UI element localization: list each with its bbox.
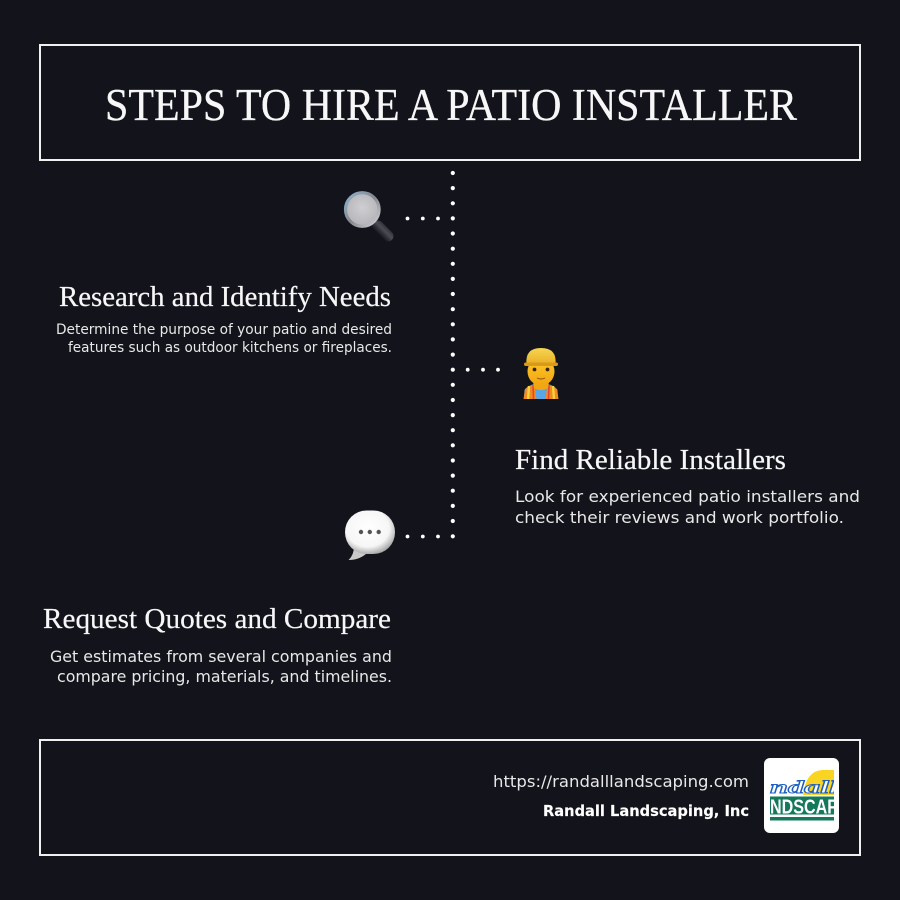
title: STEPS TO HIRE A PATIO INSTALLER — [105, 80, 797, 130]
step 3: request quotes and compare: Request Quotes and Compare — [43, 604, 391, 635]
step 2: find reliable installers: Look for experienced patio installers and — [515, 487, 860, 506]
footer banner — [40, 740, 860, 855]
step 3: request quotes and compare: Get estimates from several companies and — [50, 647, 392, 666]
step 2: find reliable installers: Find Reliable Installers — [515, 445, 786, 476]
step 2: find reliable installers: check their reviews and work portfolio. — [515, 508, 844, 527]
step 1: research and identify needs — [56, 282, 392, 356]
company name: Randall Landscaping, Inc — [543, 802, 749, 820]
step 1: research and identify needs: features such as outdoor kitchens or fireplaces. — [68, 340, 392, 356]
logo: ndall — [770, 777, 838, 797]
step 1: research and identify needs: Determine the purpose of your patio and desired — [56, 322, 392, 338]
step 3: request quotes and compare: compare pricing, materials, and timelines. — [57, 667, 392, 686]
step 2: find reliable installers — [515, 445, 860, 527]
website url: https://randalllandscaping.com — [493, 772, 749, 791]
title banner — [40, 45, 860, 160]
icon: magnifying glass — [346, 193, 388, 236]
logo — [764, 758, 839, 833]
step 1: research and identify needs: Research and Identify Needs — [59, 282, 391, 313]
logo: NDSCAP — [770, 796, 838, 818]
step 3: request quotes and compare — [43, 604, 392, 686]
dotted timeline — [406, 171, 500, 538]
icon: construction worker — [524, 348, 558, 399]
icon: speech bubble — [345, 510, 395, 560]
